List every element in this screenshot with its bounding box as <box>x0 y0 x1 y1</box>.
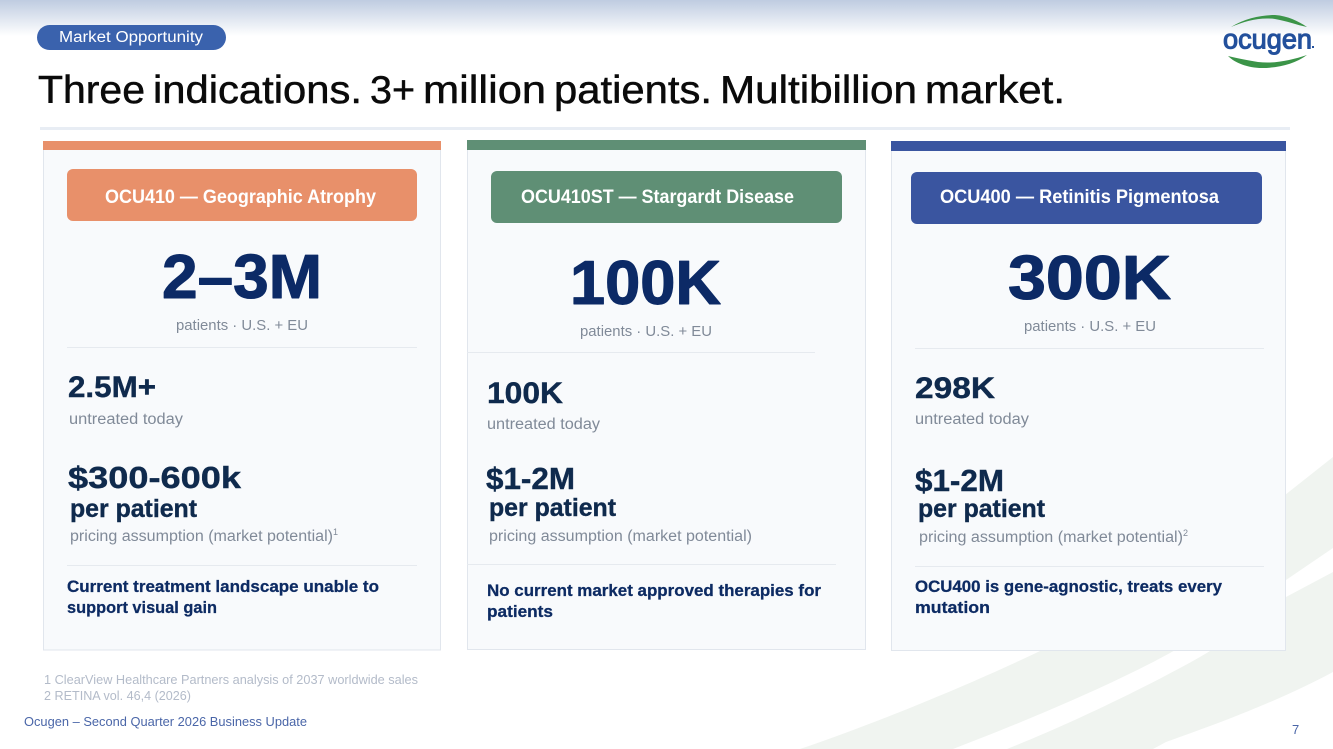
pricing stat: $1-2M <box>915 463 1004 498</box>
takeaway: mutation <box>915 598 990 617</box>
indication header <box>491 171 842 223</box>
footnotes <box>44 673 418 703</box>
footer: Ocugen – Second Quarter 2026 Business Update <box>24 714 307 729</box>
takeaway: OCU400 is gene-agnostic, treats every <box>915 577 1223 596</box>
pricing stat <box>915 463 1188 546</box>
untreated stat <box>68 371 183 428</box>
untreated stat: untreated today <box>69 411 183 428</box>
panel: OCU410 Geographic Atrophy <box>43 141 441 650</box>
pricing stat: per patient <box>70 495 198 523</box>
footnotes: 1 ClearView Healthcare Partners analysis of 2037 worldwide sales <box>44 673 418 687</box>
panel: OCU410ST Stargardt Disease <box>467 140 866 650</box>
patient count: 300K <box>1008 244 1171 313</box>
pricing stat: 1 <box>333 527 338 537</box>
indication header: OCU410 — Geographic Atrophy <box>105 187 376 208</box>
pricing stat: $1-2M <box>486 461 575 496</box>
title: million <box>423 69 546 112</box>
pricing stat <box>486 461 752 545</box>
untreated stat: untreated today <box>487 416 600 433</box>
title rule <box>40 127 1290 130</box>
patient count: 2–3M <box>162 243 322 312</box>
untreated stat <box>915 372 1029 428</box>
section pill <box>37 25 226 50</box>
patient count: 100K <box>570 249 721 318</box>
takeaway: patients <box>487 602 553 621</box>
takeaway: support visual gain <box>67 598 217 617</box>
untreated stat <box>487 377 600 433</box>
pricing stat: $300-600k <box>68 460 242 495</box>
takeaway: No current market approved therapies for <box>487 581 821 600</box>
title: market. <box>925 69 1065 112</box>
takeaway: Current treatment landscape unable to <box>67 577 379 596</box>
section pill: Market Opportunity <box>59 29 203 46</box>
title: indications. <box>153 69 362 112</box>
pricing stat: pricing assumption (market potential) <box>919 529 1183 546</box>
logo: Ocugen <box>1223 15 1314 68</box>
takeaway <box>67 577 379 617</box>
takeaway <box>487 581 821 621</box>
takeaway <box>915 577 1223 617</box>
pricing stat: 2 <box>1183 528 1188 538</box>
title: Three <box>38 69 145 112</box>
untreated stat: 298K <box>915 372 995 405</box>
indication header <box>911 172 1262 224</box>
pricing stat: per patient <box>918 495 1046 523</box>
pricing stat: pricing assumption (market potential) <box>489 528 752 545</box>
pricing stat: per patient <box>489 494 617 522</box>
untreated stat: untreated today <box>915 411 1029 428</box>
title: 3+ <box>370 69 415 112</box>
title: patients. <box>554 69 712 112</box>
untreated stat: 2.5M+ <box>68 371 156 404</box>
top gradient band <box>0 0 1333 36</box>
page number: 7 <box>1292 722 1299 737</box>
patient region: patients · U.S. + EU <box>580 323 712 340</box>
title: Multibillion <box>720 69 917 112</box>
footnotes: 2 RETINA vol. 46,4 (2026) <box>44 689 191 703</box>
pricing stat: pricing assumption (market potential) <box>70 528 333 545</box>
logo: Ocugen: ocugen <box>1223 24 1312 54</box>
background swooshes <box>800 457 1333 749</box>
indication header: OCU410ST — Stargardt Disease <box>521 187 794 208</box>
title <box>38 69 1065 112</box>
panel: OCU400 Retinitis Pigmentosa <box>891 141 1286 650</box>
patient region: patients · U.S. + EU <box>1024 318 1156 335</box>
indication header: OCU400 — Retinitis Pigmentosa <box>940 187 1219 208</box>
indication header <box>67 169 417 221</box>
pricing stat <box>68 460 338 545</box>
untreated stat: 100K <box>487 377 563 410</box>
patient region: patients · U.S. + EU <box>176 317 308 334</box>
